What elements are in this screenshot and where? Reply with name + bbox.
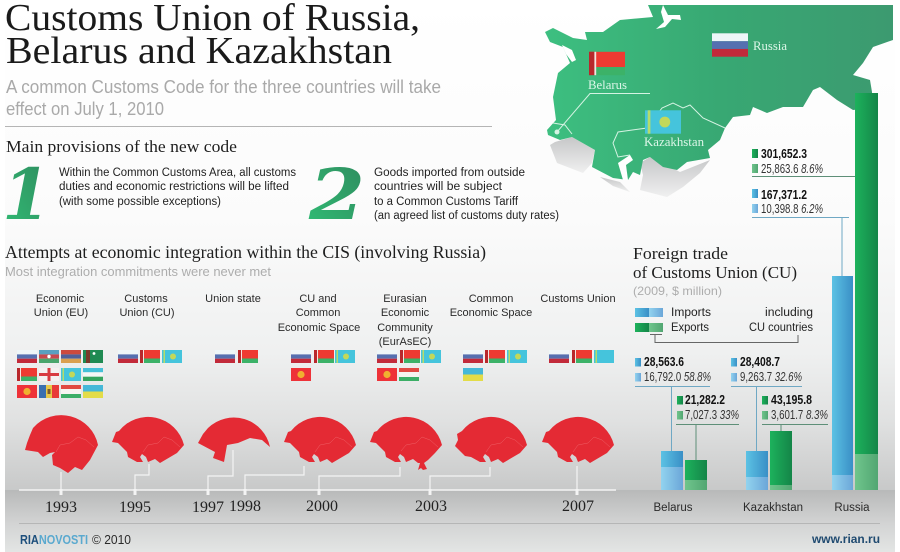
provision 1 text: duties and economic restrictions will be lifted xyxy=(59,181,289,193)
footer: website: www.rian.ru xyxy=(811,532,880,546)
numeral 1: 1 xyxy=(2,153,51,236)
provision 2 text xyxy=(374,167,559,222)
data: Russia exports xyxy=(752,146,855,176)
timeline years: 1997 xyxy=(192,499,224,516)
bar country labels: Kazakhstan xyxy=(743,502,803,514)
data: Belarus imports: 28,563.6 xyxy=(644,354,684,369)
legend xyxy=(635,307,813,342)
column: Economic Union xyxy=(17,293,103,398)
data: Russia imports: 167,371.2 xyxy=(761,187,807,202)
provision 2 text: to a Common Customs Tariff xyxy=(374,196,519,208)
column: Eurasian Economic Community: Eurasian xyxy=(383,293,427,305)
seas xyxy=(562,5,681,180)
flag: Russia xyxy=(712,33,748,57)
map labels xyxy=(588,39,787,149)
sub-heading: Most integration commitments were never met xyxy=(5,265,272,279)
data: Belarus exports xyxy=(676,392,739,460)
inner map borders xyxy=(56,437,610,452)
map 1997 xyxy=(198,418,270,462)
column: CU and Common Economic Space: CU and xyxy=(299,293,337,305)
heading: foreign trade: Foreign trade xyxy=(633,244,728,263)
data: Kazakhstan imports xyxy=(731,354,802,451)
timeline years: 1995 xyxy=(119,499,151,516)
column: Eurasian Economic Community: Community xyxy=(377,322,433,334)
map 1995 xyxy=(112,417,184,463)
timeline years: 2000 xyxy=(306,498,338,515)
timeline years: 1998 xyxy=(229,498,261,515)
provision 1 text xyxy=(59,167,296,208)
legend: Exports xyxy=(671,322,709,334)
border lines xyxy=(553,103,725,157)
timeline xyxy=(19,450,616,495)
data: Russia imports xyxy=(752,187,849,276)
flag: Belarus xyxy=(589,52,625,75)
legend: Imports xyxy=(671,307,711,319)
map: Russia, Belarus and Kazakhstan xyxy=(545,5,893,197)
data: Russia exports: 301,652.3 xyxy=(761,146,807,161)
column: Common Economic Space: Common xyxy=(469,293,513,305)
map labels: Russia xyxy=(753,39,787,53)
column: Economic Union: Economic xyxy=(36,293,85,305)
map 2003 Common Economic Space xyxy=(455,417,527,463)
column: Eurasian Economic Community: (EurAsEC) xyxy=(379,336,431,348)
provision 1 text: Within the Common Customs Area, all customs xyxy=(59,167,296,179)
green territory xyxy=(545,5,893,180)
bars: Kazakhstan xyxy=(746,431,792,490)
map 1993 xyxy=(25,415,98,473)
column: Customs Union xyxy=(540,293,616,363)
bars: Russia xyxy=(832,93,878,490)
legend: CU countries xyxy=(749,322,813,334)
heading: main provisions: Main provisions of the new code xyxy=(6,137,237,156)
column: Union state: Union state xyxy=(205,293,261,305)
column: Common Economic Space: Economic Space xyxy=(450,307,532,319)
bar country labels xyxy=(654,502,870,514)
flag: Kazakhstan xyxy=(645,110,681,134)
provision 1 text: (with some possible exceptions) xyxy=(59,196,221,208)
timeline years: 2003 xyxy=(415,498,447,515)
data: Russia imports: 10,398.8 6.2% xyxy=(761,202,823,216)
red maps of member territory xyxy=(25,415,614,473)
column: Customs Union: Customs Union xyxy=(540,293,616,305)
column: CU and Common Economic Space: Economic Space xyxy=(278,322,360,334)
footer: RIA Novosti credit: RIANOVOSTI xyxy=(20,533,88,547)
grey neighbouring countries xyxy=(550,137,710,197)
column: Union state xyxy=(205,293,261,363)
column: CU and Common Economic Space: Common xyxy=(296,307,340,319)
column: Customs Union (CU) xyxy=(118,293,182,363)
data: Belarus imports: 16,792.0 58.8% xyxy=(644,370,711,384)
heading: integration attempts: Attempts at economic integration within the CIS (involving Russia) xyxy=(5,242,486,263)
heading: foreign trade xyxy=(633,244,797,282)
map 2003 EurAsEC xyxy=(370,417,442,470)
data: Belarus exports: 7,027.3 33% xyxy=(685,408,739,422)
data: Russia exports: 25,863.6 8.6% xyxy=(761,162,823,176)
legend: including xyxy=(765,307,813,319)
column: CU and Common Economic Space xyxy=(278,293,360,381)
data: Kazakhstan imports: 28,408.7 xyxy=(740,354,780,369)
column: Customs Union (CU): Customs xyxy=(124,293,168,305)
bars: Belarus xyxy=(661,451,707,490)
bars xyxy=(661,93,878,490)
data: Kazakhstan exports: 3,601.7 8.3% xyxy=(771,408,828,422)
heading: foreign trade: of Customs Union (CU) xyxy=(633,263,797,282)
map labels: Kazakhstan xyxy=(644,135,705,149)
data: Kazakhstan exports: 43,195.8 xyxy=(771,392,812,407)
provision 2 text: Goods imported from outside xyxy=(374,167,525,179)
unit note: (2009, $ million) xyxy=(633,284,722,298)
column: Eurasian Economic Community xyxy=(377,293,441,381)
title xyxy=(5,0,420,72)
map 2007 xyxy=(542,417,614,463)
timeline years: 1993 xyxy=(45,499,77,516)
column: Economic Union: Union (EU) xyxy=(34,307,88,319)
column: Common Economic Space xyxy=(450,293,532,381)
title: Belarus and Kazakhstan xyxy=(6,30,392,72)
column: Customs Union (CU): Union (CU) xyxy=(119,307,175,319)
bar country labels: Belarus xyxy=(654,502,693,514)
subtitle: A common Customs Code for the three countries will take xyxy=(6,77,441,97)
provision 2 text: countries will be subject xyxy=(374,181,503,193)
callout line: Belarus xyxy=(554,94,650,134)
map labels: Belarus xyxy=(588,78,627,92)
bar country labels: Russia xyxy=(834,502,870,514)
subtitle xyxy=(6,77,441,119)
data: Kazakhstan exports xyxy=(762,392,828,431)
numeral 2: 2 xyxy=(308,153,365,236)
subtitle: effect on July 1, 2010 xyxy=(6,99,164,119)
footer: copyright: © 2010 xyxy=(92,533,131,547)
column: Eurasian Economic Community: Economic xyxy=(381,307,430,319)
timeline years xyxy=(45,498,594,516)
provision 2 text: (an agreed list of customs duty rates) xyxy=(374,210,559,222)
data: Kazakhstan imports: 9,263.7 32.6% xyxy=(740,370,802,384)
timeline years: 2007 xyxy=(562,498,594,515)
map 2000 xyxy=(284,417,356,463)
data: Belarus exports: 21,282.2 xyxy=(685,392,725,407)
data: Belarus imports xyxy=(635,354,711,451)
